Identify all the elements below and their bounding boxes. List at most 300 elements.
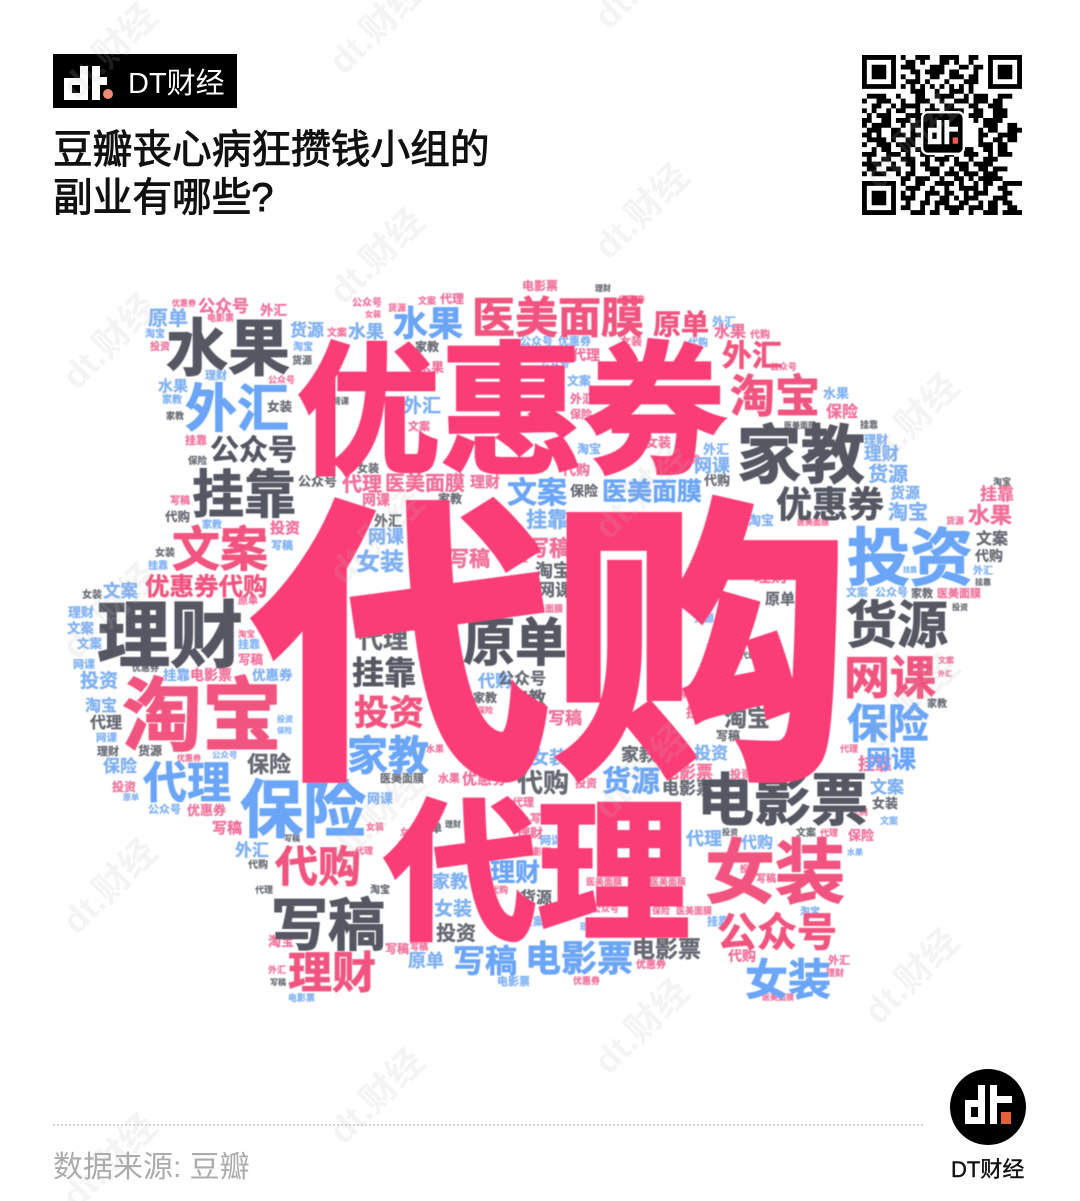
small blue words: 淘宝 (888, 500, 928, 524)
large dark words: 写稿 (271, 894, 385, 958)
large blue words: 投资 (847, 524, 973, 594)
small blue words: 文案 (103, 581, 138, 601)
small pink words: 医美面膜 (385, 472, 465, 495)
small dark words: 女装 (357, 461, 379, 475)
small dark words: 女装 (82, 588, 102, 601)
logo badge: DT财经: DT财经 (128, 67, 225, 100)
small dark words (82, 283, 1011, 987)
large dark words: 水果 (166, 315, 290, 384)
small dark words: 淘宝 (370, 883, 390, 896)
small blue words: 保险 (277, 725, 292, 735)
small dark words: 写稿 (398, 840, 418, 853)
small pink words: 货源 (946, 515, 964, 526)
small pink words: 代购 (850, 806, 868, 817)
small pink words: 写稿 (238, 652, 264, 667)
small pink words: 外汇 (268, 964, 286, 975)
small pink words: 优惠券 (636, 958, 666, 971)
small dark words: 代理 (90, 715, 122, 732)
small blue words: 保险 (103, 756, 137, 776)
small pink words: 文案 (938, 655, 954, 665)
small pink words: 代理 (820, 828, 838, 838)
small blue words: 挂靠 (238, 637, 260, 651)
small dark words: 代理 (740, 651, 756, 660)
watermarks: dt.财经 (586, 716, 697, 827)
large blue words: 保险 (847, 701, 929, 747)
small pink words (112, 278, 1014, 1002)
small dark words: 网课 (332, 396, 350, 406)
small dark words: 投资 (436, 922, 476, 945)
small dark words: 货源 (138, 743, 162, 758)
small pink words: 写稿 (527, 536, 571, 561)
small dark words: 医美面膜 (380, 771, 424, 785)
small pink words: 理财 (517, 826, 543, 841)
small dark words: 女装 (155, 546, 175, 559)
small blue words: 外汇 (403, 395, 441, 417)
small blue words: 文案 (77, 636, 103, 651)
small pink words: 水果 (418, 360, 444, 375)
QR centre logo (922, 112, 964, 154)
small blue words: 水果 (823, 386, 849, 401)
small dark words: 女装 (267, 399, 293, 414)
small pink words: 外汇 (260, 302, 287, 318)
small dark words: 代购 (975, 548, 1003, 564)
source note: 数据来源: 豆瓣 (53, 1151, 250, 1184)
small blue words: 女装 (531, 748, 567, 768)
large blue words: 水果 (393, 305, 463, 344)
medium pink words (122, 295, 936, 998)
small pink words: 优惠券 (172, 298, 196, 308)
watermarks: dt.财经 (321, 761, 432, 872)
small pink words: 女装 (620, 334, 642, 348)
medium pink words: 淘宝 (122, 672, 282, 761)
small blue words: 网课 (367, 791, 393, 806)
small blue words: 公众号 (540, 358, 570, 370)
small blue words: 文案 (522, 914, 544, 928)
small pink words: 电影票 (662, 763, 713, 782)
large blue words: 女装 (745, 957, 831, 1005)
small blue words: 家教 (162, 393, 182, 406)
large dark words: 挂靠 (352, 655, 416, 691)
small blue words: 文案 (846, 585, 868, 599)
small dark words: 原单 (420, 821, 442, 835)
small dark words: 医美面膜 (784, 420, 816, 430)
small pink words: 代理 (355, 846, 373, 856)
small pink words: 水果 (968, 503, 1012, 528)
large blue words: 文案 (507, 477, 567, 510)
small blue words: 文案 (880, 815, 898, 826)
large dark words: 挂靠 (192, 467, 296, 525)
large blue words: 保险 (240, 776, 366, 846)
small blue words: 代购 (478, 672, 512, 691)
watermarks: dt.财经 (856, 646, 967, 757)
small pink words: 优惠券 (177, 753, 201, 763)
small blue words: 公众号 (875, 586, 908, 599)
small pink words: 货源 (388, 302, 406, 313)
word: 代购: 代购 (252, 483, 850, 817)
watermarks: dt.财经 (856, 921, 967, 1032)
small pink words: 理财 (754, 567, 788, 586)
medium pink words: 网课 (844, 652, 936, 704)
small dark words: 淘宝 (535, 560, 571, 581)
small pink words: 公众号 (268, 375, 295, 385)
small pink words: 投资 (112, 780, 136, 794)
small pink words: 公众号 (352, 297, 382, 309)
small pink words: 代理 (512, 796, 534, 809)
small pink words: 优惠券 (187, 803, 226, 818)
small blue words: 原单 (408, 951, 444, 971)
small pink words: 投资 (270, 519, 300, 537)
small blue words: 女装 (434, 897, 472, 920)
small pink words: 外汇 (828, 953, 850, 967)
small blue words: 货源 (890, 484, 920, 502)
small blue words: 理财 (68, 605, 94, 620)
watermarks: dt.财经 (586, 156, 697, 267)
small blue words: 公众号 (148, 803, 181, 816)
small blue words: 网课 (694, 456, 730, 476)
small blue words: 投资 (694, 743, 728, 763)
small dark words: 家教 (927, 697, 947, 710)
small pink words: 代购 (750, 328, 770, 341)
small pink words: 理财 (826, 967, 844, 978)
small pink words: 医美面膜 (797, 517, 829, 527)
small dark words: 电影票 (662, 779, 713, 798)
small pink words: 外汇 (727, 567, 749, 581)
footer divider (53, 1124, 925, 1126)
small pink words: 水果 (714, 323, 746, 341)
small pink words: 投资 (740, 863, 758, 874)
small blue words: 公众号 (212, 750, 238, 760)
small blue words: 淘宝 (577, 441, 601, 456)
small blue words: 网课 (73, 657, 95, 671)
small pink words: 投资 (730, 767, 752, 781)
small blue words: 淘宝 (800, 905, 820, 918)
small dark words: 代购 (517, 768, 569, 798)
small dark words: 家教 (911, 586, 933, 600)
small dark words: 挂靠 (975, 577, 991, 587)
small pink words: 优惠券 (573, 975, 600, 986)
small pink words: 挂靠 (686, 705, 712, 720)
small pink words: 电影票 (207, 312, 234, 323)
large dark words: 理财 (97, 596, 243, 677)
small dark words: 公众号 (498, 670, 546, 688)
small dark words: 家教 (510, 688, 546, 709)
small pink words: 医美面膜 (676, 905, 712, 916)
small pink words: 优惠券 (462, 770, 507, 788)
small blue words: 文案 (870, 777, 904, 797)
small pink words: 女装 (366, 821, 384, 832)
small pink words: 写稿 (385, 941, 409, 956)
small pink words: 网课 (362, 492, 390, 508)
small blue words: 水果 (158, 378, 188, 395)
small blue words: 理财 (205, 368, 227, 382)
small dark words: 写稿 (270, 977, 286, 987)
footer logo: DT财经 (951, 1157, 1024, 1182)
large blue words: 写稿 (453, 943, 517, 979)
small blue words: 货源 (868, 462, 908, 486)
small dark words: 挂靠 (860, 419, 878, 430)
small pink words: 写稿 (448, 547, 490, 571)
small dark words: 理财 (595, 283, 611, 293)
small pink words: 代理 (840, 744, 858, 754)
small pink words: 写稿 (530, 811, 552, 825)
small pink words: 代理 (342, 474, 382, 496)
small blue words: 家教 (202, 518, 222, 531)
small pink words: 写稿 (756, 872, 776, 885)
large dark words: 原单 (463, 615, 567, 673)
small blue words: 女装 (356, 549, 404, 576)
small dark words: 原单 (765, 591, 795, 608)
small pink words: 代理 (440, 292, 464, 306)
title (53, 128, 490, 220)
small pink words: 代购 (668, 688, 686, 699)
small pink words: 投资 (150, 340, 170, 353)
small pink words: 原单 (238, 594, 258, 607)
footer logo (950, 1069, 1026, 1182)
small blue words: 理财 (580, 921, 598, 932)
small dark words: 文案 (976, 529, 1008, 548)
watermarks: dt.财经 (321, 201, 432, 312)
medium pink words: 医美面膜 (472, 295, 644, 343)
small blue words: 文案 (67, 620, 94, 636)
small pink words: 代购 (562, 462, 590, 478)
watermarks: dt.财经 (856, 366, 967, 477)
small pink words: 挂靠 (980, 485, 1014, 504)
small dark words: 家教 (473, 690, 497, 705)
small dark words: 保险 (188, 455, 208, 467)
small blue words: 文案 (567, 373, 591, 388)
small blue words: 优惠券 (252, 667, 293, 683)
small blue words: 外汇 (712, 314, 736, 329)
small blue words: 理财 (864, 444, 899, 464)
small blue words: 代理 (686, 829, 722, 849)
small pink words: 保险 (848, 828, 874, 843)
small dark words: 保险 (247, 752, 291, 777)
small blue words: 挂靠 (163, 667, 190, 683)
large dark words: 家教 (737, 420, 865, 492)
small pink words: 文案 (630, 885, 650, 898)
small blue words (67, 307, 993, 1003)
small pink words: 电影票 (190, 667, 232, 683)
small pink words: 优惠券 (618, 294, 645, 305)
medium pink words: 淘宝 (730, 371, 820, 422)
large blue words: 家教 (347, 733, 429, 779)
large dark words (97, 315, 948, 958)
large blue words: 货源 (602, 765, 660, 798)
small pink words: 保险 (570, 407, 592, 421)
small pink words: 原单 (495, 926, 513, 937)
large blue words: 网课 (866, 746, 916, 774)
word: 优惠券: 优惠券 (297, 334, 726, 493)
small pink words: 代购 (728, 948, 756, 964)
small blue words: 外汇 (235, 841, 269, 860)
small pink words: 医美面膜 (937, 586, 981, 600)
small blue words: 挂靠 (903, 565, 917, 574)
watermarks: dt.财经 (54, 556, 165, 667)
small dark words: 网课 (538, 581, 572, 600)
small dark words: 外汇 (374, 513, 402, 529)
watermarks: dt.财经 (321, 1041, 432, 1152)
small pink words: 代购 (680, 453, 700, 466)
watermarks: dt.财经 (586, 971, 697, 1082)
small pink words: 电影票 (524, 846, 551, 857)
small blue words: 挂靠 (148, 559, 168, 572)
watermarks: dt.财经 (54, 286, 165, 397)
small blue words: 网课 (368, 527, 404, 547)
small blue words: 货源 (694, 612, 714, 625)
title: 副业有哪些? (53, 176, 274, 220)
small blue words: 水果 (847, 847, 863, 857)
large dark words: 公众号 (210, 434, 297, 467)
small blue words: 原单 (123, 792, 139, 802)
small pink words: 女装 (400, 826, 418, 837)
small blue words: 理财 (864, 433, 888, 447)
small dark words: 文案 (796, 826, 816, 839)
small dark words: 优惠券 (132, 662, 159, 673)
small blue words: 货源 (625, 439, 643, 450)
medium pink words: 理财 (288, 949, 376, 998)
small pink words: 保险 (652, 905, 670, 916)
small pink words: 医美面膜 (762, 992, 794, 1002)
large blue words: 理财 (490, 859, 540, 887)
small blue words: 代购 (688, 336, 708, 349)
small blue words: 货源 (290, 320, 324, 340)
small pink words: 淘宝 (238, 629, 255, 639)
small pink words: 家教 (510, 553, 528, 564)
small pink words: 外汇 (938, 669, 952, 678)
small dark words: 女装 (872, 796, 898, 811)
watermarks: dt.财经 (586, 436, 697, 547)
small dark words: 公众号 (298, 474, 337, 489)
small dark words: 货源 (520, 888, 552, 907)
small pink words: 女装 (645, 435, 671, 450)
small dark words: 理财 (97, 744, 119, 758)
small dark words: 代购 (248, 858, 268, 871)
small blue words: 投资 (277, 714, 293, 724)
small dark words: 投资 (952, 602, 968, 612)
small pink words: 挂靠 (185, 433, 207, 447)
medium pink words: 优惠券代购 (145, 573, 268, 601)
small dark words: 投资 (722, 827, 738, 837)
word: 代理: 代理 (384, 789, 690, 960)
small pink words: 医美面膜 (650, 876, 686, 887)
large blue words (143, 305, 973, 1005)
small pink words: 电影票 (522, 278, 558, 293)
small blue words: 淘宝 (85, 696, 117, 715)
small pink words: 公众号 (770, 362, 797, 372)
small dark words: 家教 (621, 744, 657, 765)
small blue words: 公众号 (520, 335, 553, 348)
logo badge: DT财经 (53, 54, 237, 108)
large blue words: 电影票 (525, 938, 633, 979)
small dark words: 理财 (445, 819, 461, 829)
small pink words: 写稿 (170, 494, 190, 507)
small dark words: 家教 (166, 410, 184, 421)
small dark words: 淘宝 (724, 705, 770, 731)
small blue words: 写稿 (271, 538, 293, 552)
medium pink words: 女装 (705, 834, 845, 912)
small pink words: 医美面膜 (586, 876, 622, 887)
small pink words: 写稿 (548, 708, 582, 728)
large dark words: 货源 (846, 597, 948, 654)
large blue words: 代理 (143, 759, 231, 808)
small pink words: 保险 (826, 402, 858, 421)
small pink words: 投资 (575, 776, 597, 790)
medium pink words: 公众号 (717, 911, 837, 955)
large blue words: 医美面膜 (602, 478, 702, 506)
small pink words: 女装 (365, 309, 381, 319)
small dark words: 写稿 (716, 728, 740, 743)
small pink words: 淘宝 (268, 934, 294, 949)
small blue words: 挂靠 (707, 914, 729, 928)
small pink words: 保险 (477, 705, 493, 715)
small pink words: 水果 (438, 771, 460, 785)
small blue words: 水果 (348, 322, 384, 342)
small blue words: 代购 (741, 833, 773, 852)
small blue words: 电影票 (497, 974, 530, 988)
small pink words: 公众号 (592, 904, 619, 914)
small pink words: 挂靠 (858, 755, 892, 774)
small blue words: 挂靠 (526, 509, 568, 532)
small blue words: 优惠券 (558, 334, 591, 348)
small dark words: 代理 (358, 626, 408, 654)
small blue words: 网课 (96, 731, 117, 744)
small blue words: 外汇 (973, 564, 993, 577)
small pink words: 水果 (477, 603, 495, 614)
medium pink words: 投资 (354, 694, 424, 733)
medium pink words: 外汇 (722, 340, 782, 373)
word cloud shaped like a piggy bank (67, 278, 1014, 1005)
small pink words: 代理 (572, 347, 600, 363)
small pink words: 代购 (490, 884, 508, 895)
small blue words: 网课 (540, 833, 562, 847)
watermarks: dt.财经 (321, 481, 432, 592)
watermarks: dt.财经 (856, 86, 967, 197)
watermarks: dt.财经 (54, 831, 165, 942)
small dark words: 代理 (255, 885, 273, 895)
small blue words: 淘宝 (293, 340, 313, 353)
small blue words: 电影票 (288, 992, 315, 1003)
small pink words: 公众号 (198, 297, 249, 316)
small pink words: 文案 (418, 295, 436, 306)
small pink words: 文案 (327, 326, 347, 339)
large dark words: 电影票 (697, 769, 868, 833)
small blue words: 投资 (80, 670, 118, 692)
small pink words: 写稿 (410, 941, 428, 952)
small blue words: 家教 (432, 871, 468, 892)
large blue words: 外汇 (185, 381, 289, 439)
small dark words: 电影票 (632, 936, 701, 962)
small blue words: 淘宝 (145, 327, 165, 340)
small dark words: 写稿 (284, 833, 300, 843)
small pink words: 理财 (470, 473, 500, 491)
small dark words: 代购 (704, 473, 730, 488)
small blue words: 外汇 (703, 442, 729, 457)
medium pink words: 文案 (172, 524, 268, 577)
small dark words: 家教 (438, 491, 462, 506)
small dark words: 货源 (292, 354, 312, 367)
QR code (862, 55, 1022, 215)
largest pink words (252, 334, 850, 960)
large dark words: 优惠券 (776, 484, 884, 525)
medium pink words: 原单 (653, 309, 709, 340)
small dark words: 保险 (570, 483, 598, 499)
small dark words: 代购 (165, 509, 190, 524)
small blue words: 原单 (148, 307, 188, 330)
small pink words: 医美面膜 (527, 603, 563, 614)
medium pink words: 代购 (275, 844, 361, 892)
title: 豆瓣丧心病狂攒钱小组的 (53, 128, 490, 172)
small pink words: 写稿 (212, 819, 242, 837)
